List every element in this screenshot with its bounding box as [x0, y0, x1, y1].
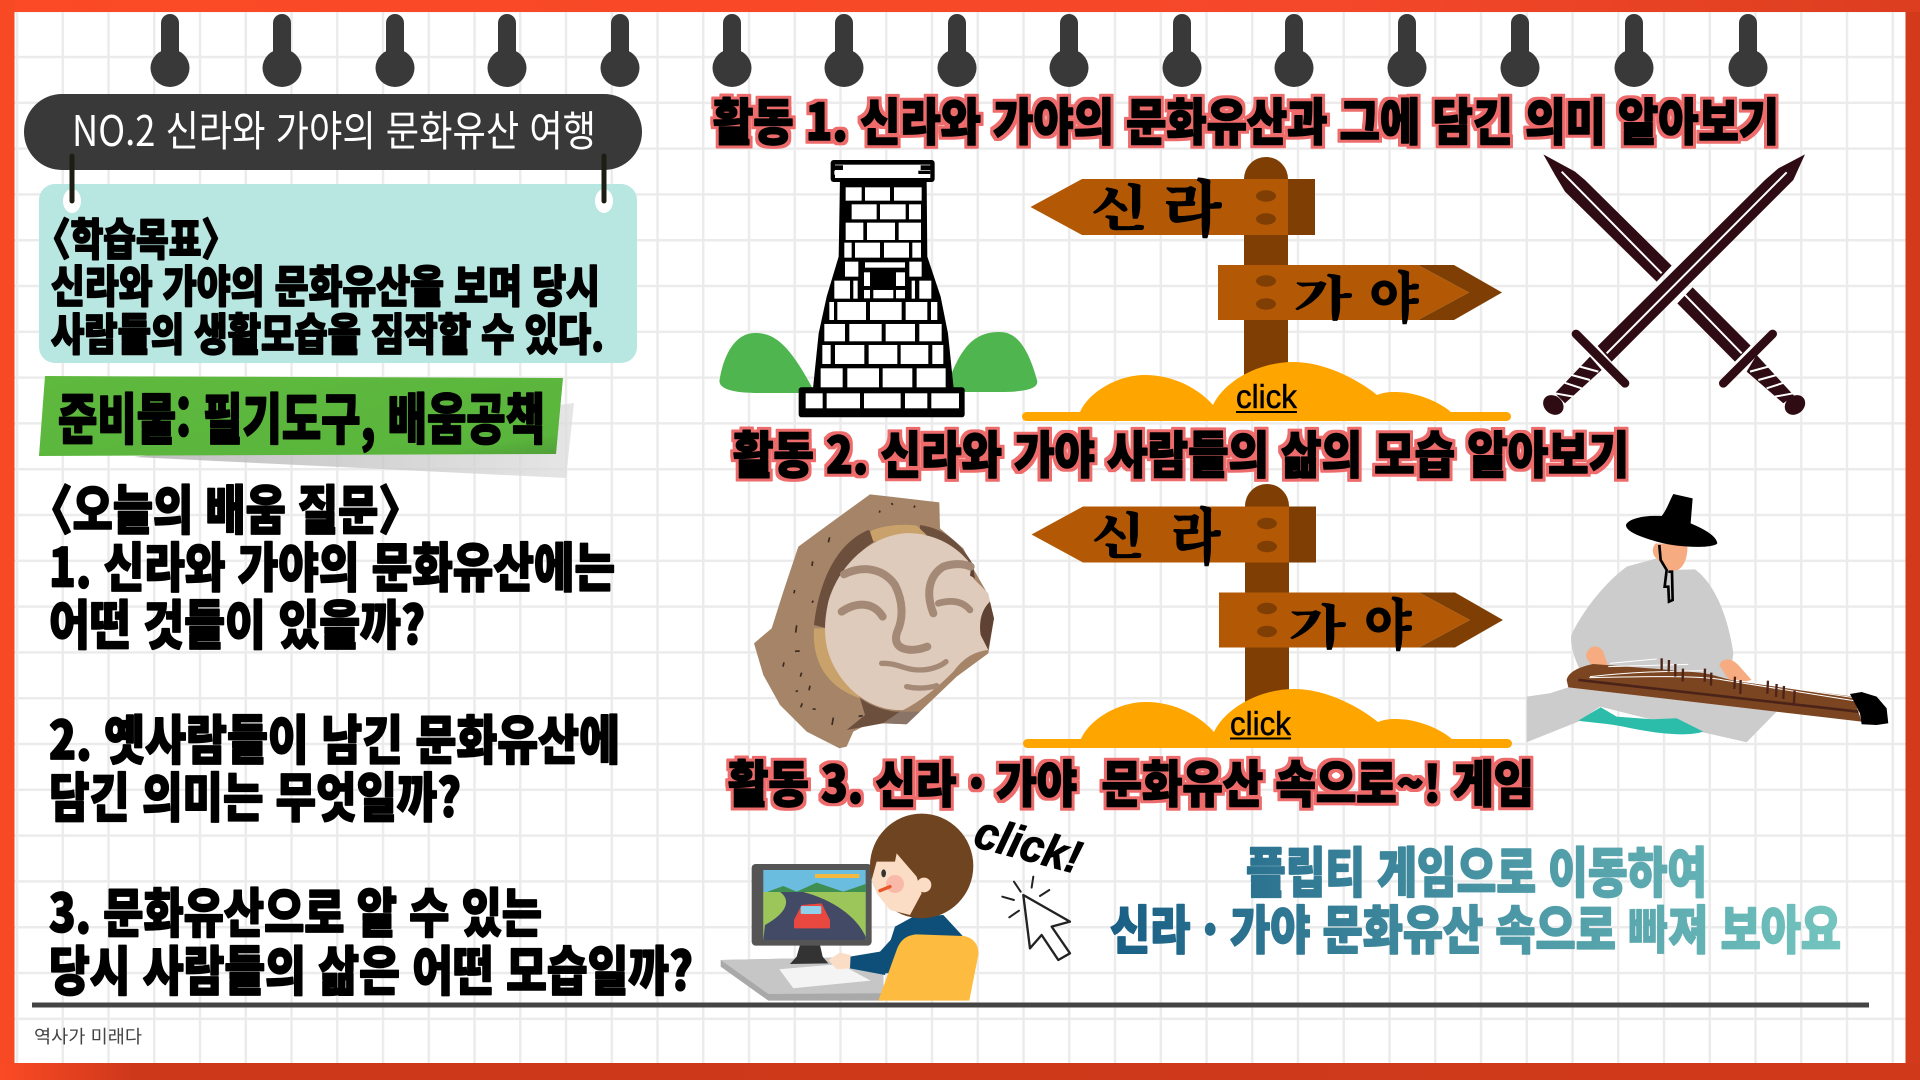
bridges [1662, 658, 1795, 703]
icon: Silla roof-tile face [754, 494, 994, 748]
text: learning goal line 1: 신라와 가야의 문화유산을 보며 당시 [51, 251, 600, 315]
signpost 2 [1023, 484, 1512, 748]
post [1245, 484, 1289, 734]
icon: crossed swords [1539, 154, 1809, 419]
panel: learning goal [35, 184, 637, 363]
callout: Flippity game: 플립티 게임으로 이동하여 [1246, 829, 1707, 908]
post [1244, 157, 1288, 407]
icon: child playing computer game [721, 814, 978, 1001]
monitor stand [790, 945, 828, 964]
sign: Silla: 라 [1163, 160, 1222, 249]
activity 2 heading: 활동 2. 신라와 가야 사람들의 삶의 모습 알아보기 [733, 416, 1629, 488]
hanger holes [63, 189, 613, 213]
signpost 1 [1022, 157, 1511, 421]
text: click!: click! [969, 805, 1087, 884]
sign: Gaya [1218, 255, 1502, 335]
torso [880, 915, 963, 973]
hand [828, 953, 851, 969]
car [794, 903, 830, 928]
bottom rule [32, 1002, 1869, 1008]
desk [721, 957, 883, 1001]
monitor [752, 864, 872, 946]
hand right [1719, 659, 1752, 684]
text: learning goal heading: 〈학습목표〉 [35, 204, 237, 268]
sign: Gaya: 야 [1369, 255, 1420, 335]
sign: Silla [1032, 488, 1316, 577]
panel: today's questions [29, 469, 693, 1006]
lower robe [1527, 687, 1777, 742]
activity 1 heading: 활동 1. 신라와 가야의 문화유산과 그에 담긴 의미 알아보기 [713, 83, 1779, 155]
panel: materials tape: 준비물: 필기도구, 배움공책 [58, 375, 545, 455]
click link: click [1236, 378, 1297, 415]
activity 3 heading: 활동 3. 신라 · 가야 문화유산 속으로~! 게임 [728, 745, 1534, 817]
sign: Silla [1030, 160, 1315, 249]
icon: gayageum player [1527, 494, 1888, 742]
sign: Gaya: 가 [1293, 260, 1353, 329]
panel: materials tape [39, 375, 574, 478]
seat cushion [1578, 707, 1703, 734]
keyboard [779, 964, 871, 988]
icon: stone pagoda with hills [719, 160, 1037, 417]
sign: Silla: 라 [1171, 488, 1221, 577]
footer credit: 역사가 미래다 [34, 1023, 142, 1049]
question 2 line 1: 2. 옛사람들이 남긴 문화유산에 [49, 699, 620, 775]
notebook spiral rings [150, 14, 1768, 87]
hand left [1586, 646, 1610, 674]
upper robe [1571, 558, 1733, 680]
chair [878, 934, 978, 1001]
hair [870, 814, 973, 918]
question 1 line 1: 1. 신라와 가야의 문화유산에는 [49, 526, 615, 602]
zither [1567, 664, 1862, 722]
sign: Silla: 신 [1091, 497, 1145, 569]
mound [1022, 362, 1511, 421]
hanger strings [72, 156, 604, 201]
title bar: NO.2 신라와 가야의 문화유산 여행 [72, 98, 596, 159]
click link: click [1230, 705, 1291, 742]
questions heading: 〈오늘의 배움 질문〉 [29, 469, 422, 545]
question 1 line 2: 어떤 것들이 있을까? [49, 584, 425, 660]
mound [1023, 689, 1512, 748]
callout: Flippity game: 신라 · 가야 문화유산 속으로 빠져 보아요 [1110, 889, 1841, 964]
sword pointing top-right [1539, 154, 1805, 419]
tassel [1850, 692, 1888, 725]
question 3 line 1: 3. 문화유산으로 알 수 있는 [49, 872, 542, 948]
sign: Gaya [1219, 582, 1503, 662]
sign: Gaya: 야 [1364, 582, 1413, 662]
question 2 line 2: 담긴 의미는 무엇일까? [49, 756, 461, 832]
arm [850, 933, 897, 975]
text: learning goal line 2: 사람들의 생활모습을 짐작할 수 있다. [51, 299, 604, 363]
strings [1589, 659, 1860, 702]
tie [1659, 545, 1673, 602]
sign: Gaya: 가 [1288, 589, 1347, 658]
face and neck [1653, 543, 1687, 571]
sword pointing top-left [1543, 154, 1809, 419]
hat [1626, 494, 1717, 547]
icon: mouse cursor [1002, 877, 1070, 960]
sign: Silla: 신 [1090, 169, 1148, 241]
face [872, 853, 922, 915]
question 3 line 2: 당시 사람들의 삶은 어떤 모습일까? [49, 930, 693, 1006]
callout: Flippity game [1110, 829, 1841, 964]
